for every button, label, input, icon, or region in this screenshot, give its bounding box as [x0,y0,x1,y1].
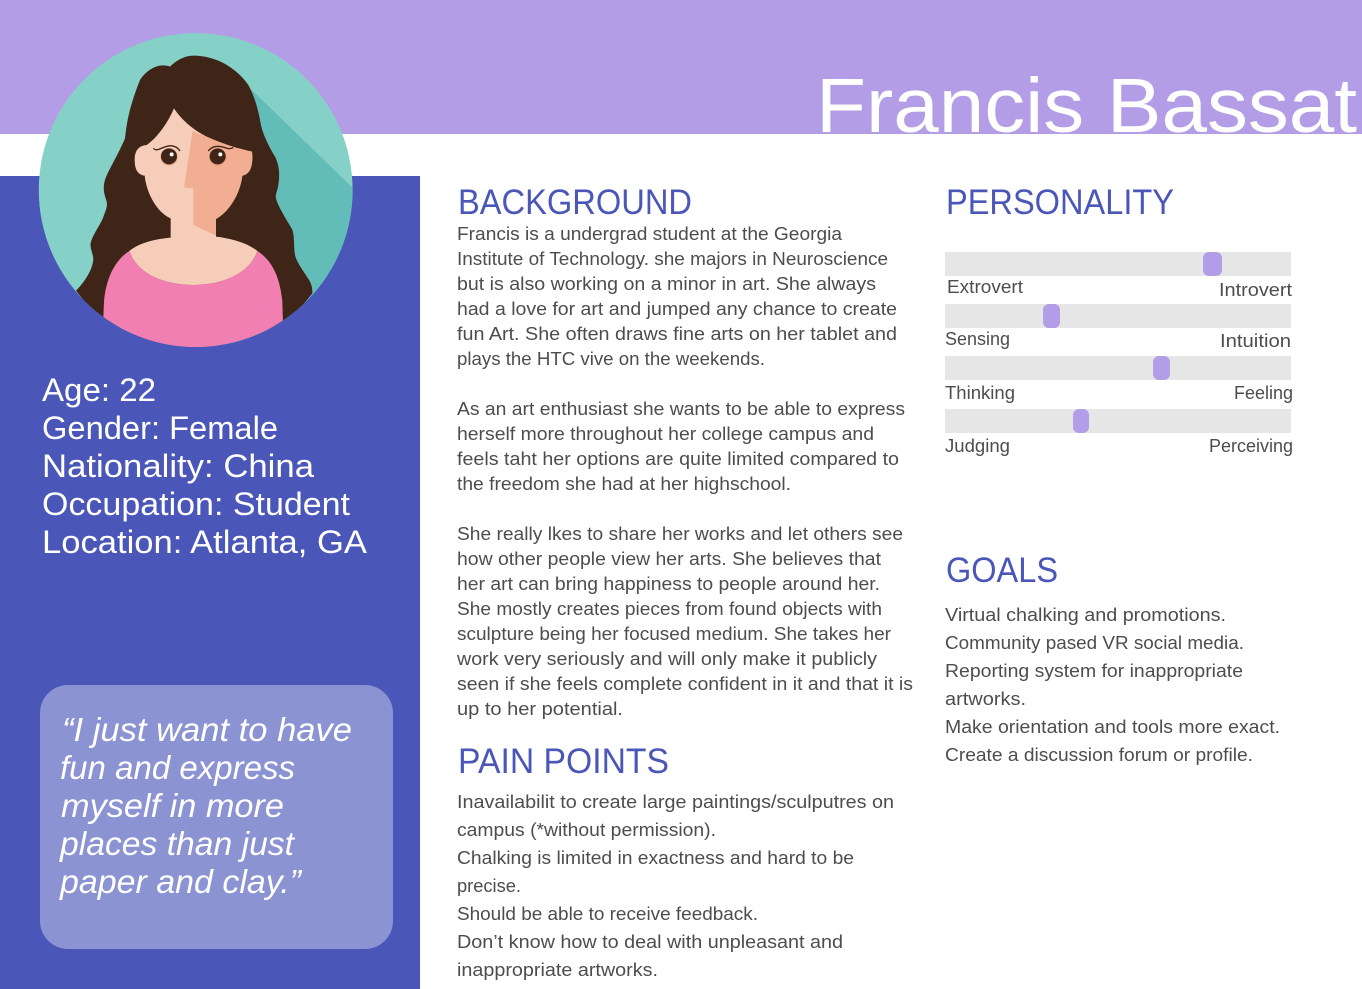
goals text: Create a discussion forum or profile. [945,745,1253,765]
background text: She mostly creates pieces from found objects with [457,599,882,619]
slider: judging / perceiving: Judging [945,436,1010,456]
left profile panel [0,176,420,989]
slider: extrovert / introvert [945,252,1292,300]
heading: pain points: PAIN POINTS [458,742,669,781]
background text: Francis is a undergrad student at the Georgia [457,224,843,244]
profile details: Gender: Female [42,410,278,446]
background text: up to her potential. [457,699,623,719]
goals text: Community pased VR social media. [945,633,1244,653]
quote box: myself in more [61,787,284,824]
profile details: Occupation: Student [42,486,350,522]
quote box: paper and clay.” [59,863,303,900]
profile details [42,372,368,560]
goals text: artworks. [945,689,1026,709]
heading: goals: GOALS [946,551,1058,590]
background text: herself more throughout her college campus and [457,424,874,444]
goals text: Reporting system for inappropriate [945,661,1243,681]
background text: plays the HTC vive on the weekends. [457,349,765,369]
slider: extrovert / introvert: Introvert [1219,280,1292,300]
slider: sensing / intuition: Intuition [1220,331,1291,351]
background text: seen if she feels complete confident in it and that it is [457,674,913,694]
background text: feels taht her options are quite limited compared to [457,449,899,469]
background text: fun Art. She often draws fine arts on her tablet and [457,324,897,344]
background text: her art can bring happiness to people around her. [457,574,880,594]
avatar [39,33,355,358]
background text: how other people view her arts. She believes that [457,549,881,569]
goals text [945,605,1280,765]
pain points text: Inavailabilit to create large paintings/sculputres on [457,792,894,812]
quote box [40,685,393,949]
goals text: Make orientation and tools more exact. [945,717,1280,737]
title: Francis Bassat [816,63,1357,149]
slider: thinking / feeling [945,356,1293,403]
profile details: Location: Atlanta, GA [42,524,368,560]
background text: had a love for art and jumped any chance to create [457,299,897,319]
pain points text: precise. [457,876,521,896]
heading: personality: PERSONALITY [946,183,1174,222]
profile details: Nationality: China [42,448,314,484]
goals text: Virtual chalking and promotions. [945,605,1226,625]
quote box: “I just want to have [62,711,352,748]
background text: As an art enthusiast she wants to be able to express [457,399,905,419]
background text: work very seriously and will only make it publicly [456,649,877,669]
quote box: fun and express [60,749,295,786]
pain points text: inappropriate artworks. [457,960,658,980]
background text: Institute of Technology. she majors in Neuroscience [457,249,888,269]
pain points text: Should be able to receive feedback. [457,904,758,924]
pain points text: Chalking is limited in exactness and hard to be [457,848,854,868]
profile details: Age: 22 [42,372,156,408]
background text: but is also working on a minor in art. She always [457,274,876,294]
pain points text: campus (*without permission). [457,820,716,840]
personality sliders [945,252,1293,456]
slider: thinking / feeling: Thinking [945,383,1015,403]
slider: sensing / intuition: Sensing [945,329,1010,349]
pain points text: Don’t know how to deal with unpleasant and [457,932,843,952]
slider: sensing / intuition [945,304,1291,351]
background text: sculpture being her focused medium. She takes her [457,624,891,644]
background text [456,224,913,719]
pain points text [457,792,894,980]
quote box: places than just [59,825,296,862]
heading: background: BACKGROUND [458,183,692,222]
slider: judging / perceiving: Perceiving [1209,436,1293,456]
slider: judging / perceiving [945,409,1293,456]
background text: She really lkes to share her works and let others see [457,524,903,544]
slider: extrovert / introvert: Extrovert [947,277,1023,297]
slider: thinking / feeling: Feeling [1234,383,1293,403]
header band [0,0,1362,134]
background text: the freedom she had at her highschool. [457,474,791,494]
